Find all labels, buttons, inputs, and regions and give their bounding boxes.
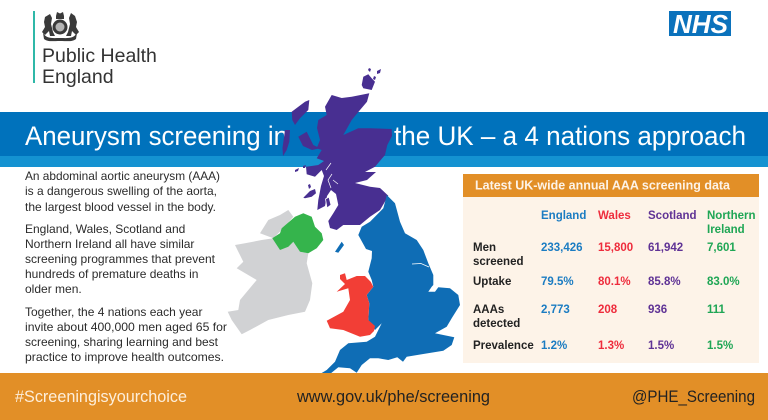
column: Scotland: Scotland	[648, 210, 697, 222]
column: Northern Ireland: Northern	[707, 210, 756, 222]
column: Scotland: 85.8%	[648, 276, 681, 288]
column: Scotland	[648, 210, 697, 352]
footer bar	[0, 373, 768, 420]
column: Scotland: 61,942	[648, 242, 683, 254]
white sea lochs	[326, 163, 338, 188]
map: Wales	[327, 273, 375, 337]
text block: introduction: is a dangerous swelling of the aorta,	[25, 184, 217, 198]
column: Wales: 1.3%	[598, 340, 624, 352]
text block: introduction: older men.	[25, 282, 82, 296]
column: Northern Ireland: 111	[707, 304, 726, 316]
column: England: England	[541, 210, 586, 222]
column: row labels: screened	[473, 256, 524, 268]
column: Wales: 208	[598, 304, 618, 316]
text block: introduction: Northern Ireland all have similar	[25, 237, 194, 251]
footer bar: www.gov.uk/phe/screening	[296, 387, 490, 406]
footer bar: @PHE_Screening	[632, 387, 755, 406]
column: Northern Ireland: 1.5%	[707, 340, 733, 352]
column: row labels: AAAs	[473, 304, 504, 316]
icon: Isle of Man	[335, 242, 344, 253]
column: England: 233,426	[541, 242, 583, 254]
text block: introduction: screening programmes that prevent	[25, 252, 216, 266]
column: England	[541, 210, 586, 352]
title banner: Aneurysm screening in	[25, 121, 288, 151]
column: England: 2,773	[541, 304, 570, 316]
table heading	[463, 174, 759, 197]
title banner	[0, 112, 768, 167]
logo: Public Health England	[33, 11, 157, 88]
text block: introduction: England, Wales, Scotland and	[25, 222, 185, 236]
column: Northern Ireland: Ireland	[707, 224, 745, 236]
text block: introduction: the largest blood vessel in the body.	[25, 200, 216, 214]
column: Scotland: 1.5%	[648, 340, 674, 352]
logo: Public Health England: Public Health	[42, 45, 157, 67]
column: Wales: 80.1%	[598, 276, 631, 288]
table heading: Latest UK-wide annual AAA screening data	[475, 178, 731, 192]
column: England: 1.2%	[541, 340, 567, 352]
text block: introduction: invite about 400,000 men aged 65 for	[25, 320, 227, 334]
column: Wales: Wales	[598, 210, 631, 222]
text block: introduction: practice to improve health outcomes.	[25, 350, 224, 364]
column: Wales	[598, 210, 633, 352]
panel: screening data table	[463, 174, 759, 363]
text block: introduction: hundreds of premature deaths in	[25, 267, 198, 281]
text block: introduction: screening, sharing learning and best	[25, 335, 219, 349]
title banner: the UK – a 4 nations approach	[394, 121, 746, 151]
column: Wales: 15,800	[598, 242, 633, 254]
column: row labels: Uptake	[473, 276, 511, 288]
text block: introduction: Together, the 4 nations each year	[25, 305, 202, 319]
map: Scotland	[282, 68, 392, 230]
column: row labels: Prevalence	[473, 340, 534, 352]
map: Republic of Ireland	[228, 210, 312, 334]
icon: royal crest	[42, 12, 79, 41]
column: England: 79.5%	[541, 276, 574, 288]
column: row labels: detected	[473, 318, 520, 330]
map: England	[318, 195, 460, 378]
column: row labels	[473, 242, 534, 352]
column: Northern Ireland: 83.0%	[707, 276, 740, 288]
text block: introduction	[25, 169, 227, 364]
column: Northern Ireland: 7,601	[707, 242, 736, 254]
column: Northern Ireland	[707, 210, 756, 352]
logo: NHS: NHS	[673, 9, 729, 39]
text block: introduction: An abdominal aortic aneurysm (AAA)	[25, 169, 220, 183]
logo: Public Health England: England	[42, 66, 114, 88]
column: Scotland: 936	[648, 304, 667, 316]
footer bar: #Screeningisyourchoice	[15, 387, 187, 406]
map: Northern Ireland	[272, 213, 323, 253]
column: row labels: Men	[473, 242, 496, 254]
